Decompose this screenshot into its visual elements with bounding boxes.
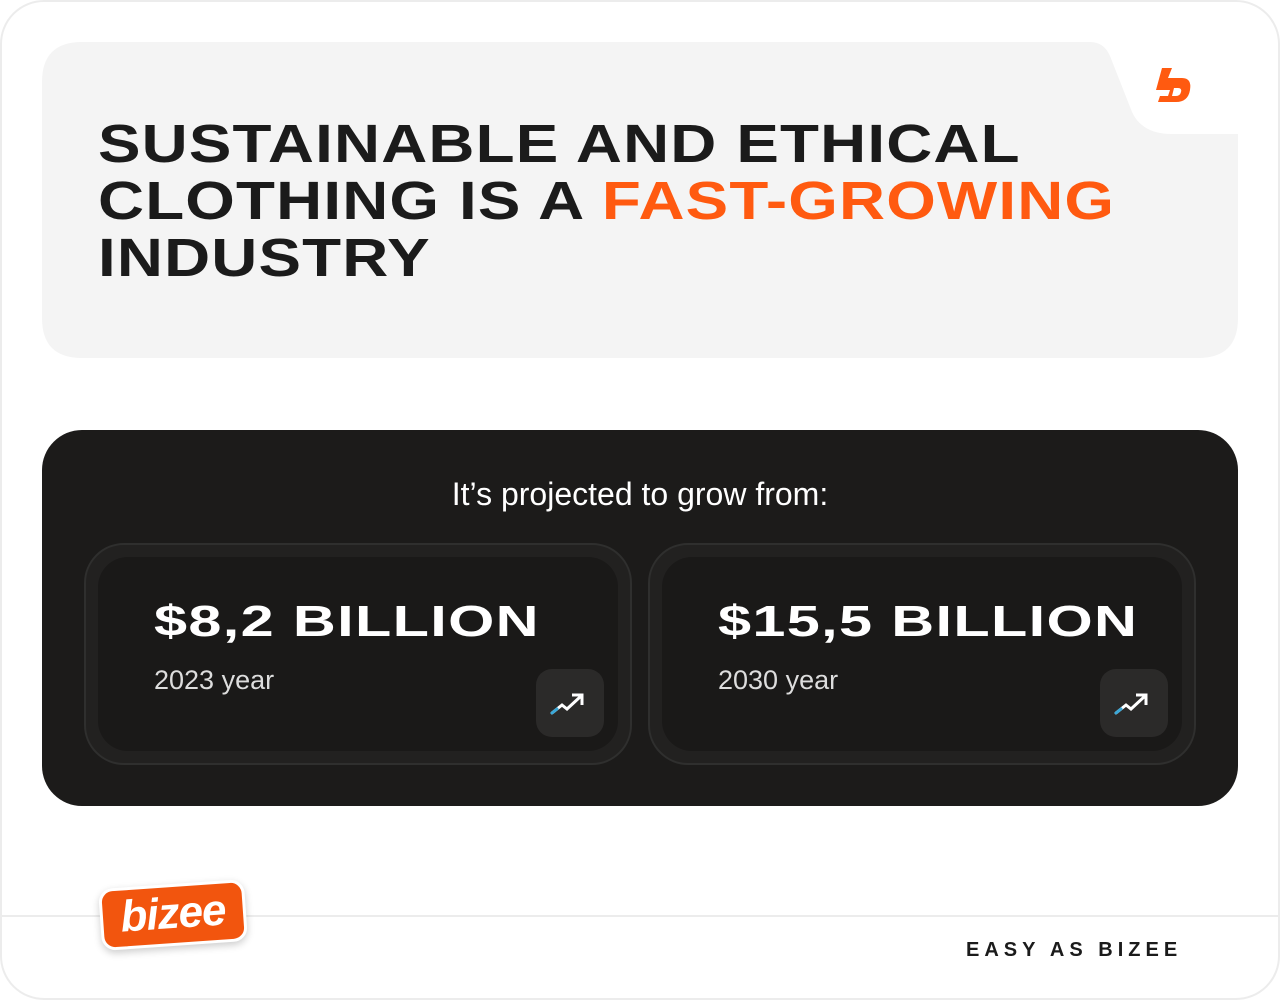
card: 2023 xyxy=(84,543,632,765)
value 2023: $8,2 BILLION xyxy=(154,597,540,646)
card: 2030 xyxy=(648,543,1196,765)
value 2030: $15,5 BILLION xyxy=(718,597,1138,646)
icon: trend up xyxy=(1100,669,1168,737)
title: INDUSTRY xyxy=(98,228,431,288)
text: subtitle: It’s projected to grow from: xyxy=(452,476,828,512)
icon: trend up xyxy=(536,669,604,737)
year label: 2030 year xyxy=(718,665,838,695)
tagline: EASY AS BIZEE xyxy=(966,939,1182,961)
year label: 2023 year xyxy=(154,665,274,695)
title: CLOTHING IS A FAST-GROWING xyxy=(98,171,1115,231)
logo: bizee sticker xyxy=(98,879,248,951)
title: SUSTAINABLE AND ETHICAL xyxy=(98,114,1021,174)
panel: projection xyxy=(42,430,1238,806)
title xyxy=(98,114,1115,288)
panel: title background xyxy=(42,42,1238,358)
icon: bizee mark xyxy=(1156,68,1190,102)
logo: bizee sticker: bizee xyxy=(119,885,227,942)
